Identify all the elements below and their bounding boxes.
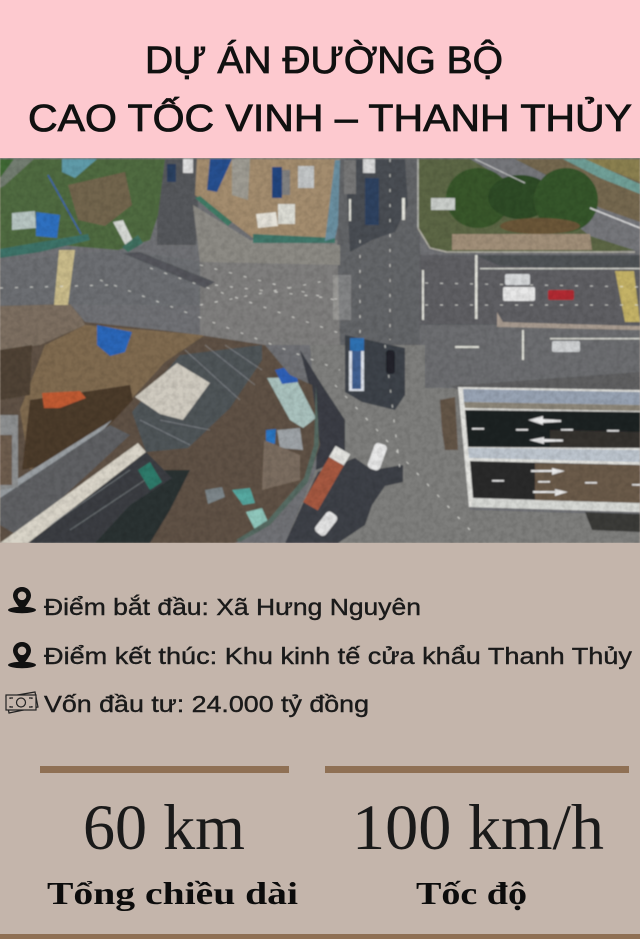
road markings (54, 198, 640, 360)
label: speed: Tốc độ (416, 875, 527, 911)
white arrows on underpass (472, 416, 640, 496)
aerial photo of intersection (0, 158, 640, 543)
value: 100 km/h: 100 km/h (352, 792, 604, 864)
bottom-left construction site (0, 300, 330, 543)
icon: banknotes (6, 692, 38, 713)
label: total length: Tổng chiều dài (47, 875, 298, 911)
end point text: Điểm kết thúc: Khu kinh tế cửa khẩu Thanh Thủy (44, 643, 632, 669)
heading line 1: DỰ ÁN ĐƯỜNG BỘ (145, 38, 503, 82)
icon: start location pin (8, 587, 36, 613)
photo grain (0, 158, 640, 543)
top-left green plot (0, 159, 165, 258)
top-centre construction yard (195, 159, 340, 238)
value: 60 km: 60 km (83, 792, 245, 864)
panel: project details (6, 587, 632, 717)
vehicles (344, 160, 356, 194)
heading line 2: CAO TỐC VINH – THANH THỦY (28, 95, 632, 140)
road surfaces (0, 250, 200, 306)
stat: total length (40, 766, 298, 911)
panel: title banner (0, 0, 640, 158)
start point text: Điểm bắt đầu: Xã Hưng Nguyên (44, 594, 421, 620)
icon: end location pin (8, 642, 36, 668)
shadows (345, 159, 408, 252)
bottom border bar (0, 934, 640, 939)
stat: speed (325, 766, 629, 911)
top-right trees and verge (418, 159, 640, 252)
underpass (458, 387, 640, 512)
investment text: Vốn đầu tư: 24.000 tỷ đồng (44, 691, 369, 717)
